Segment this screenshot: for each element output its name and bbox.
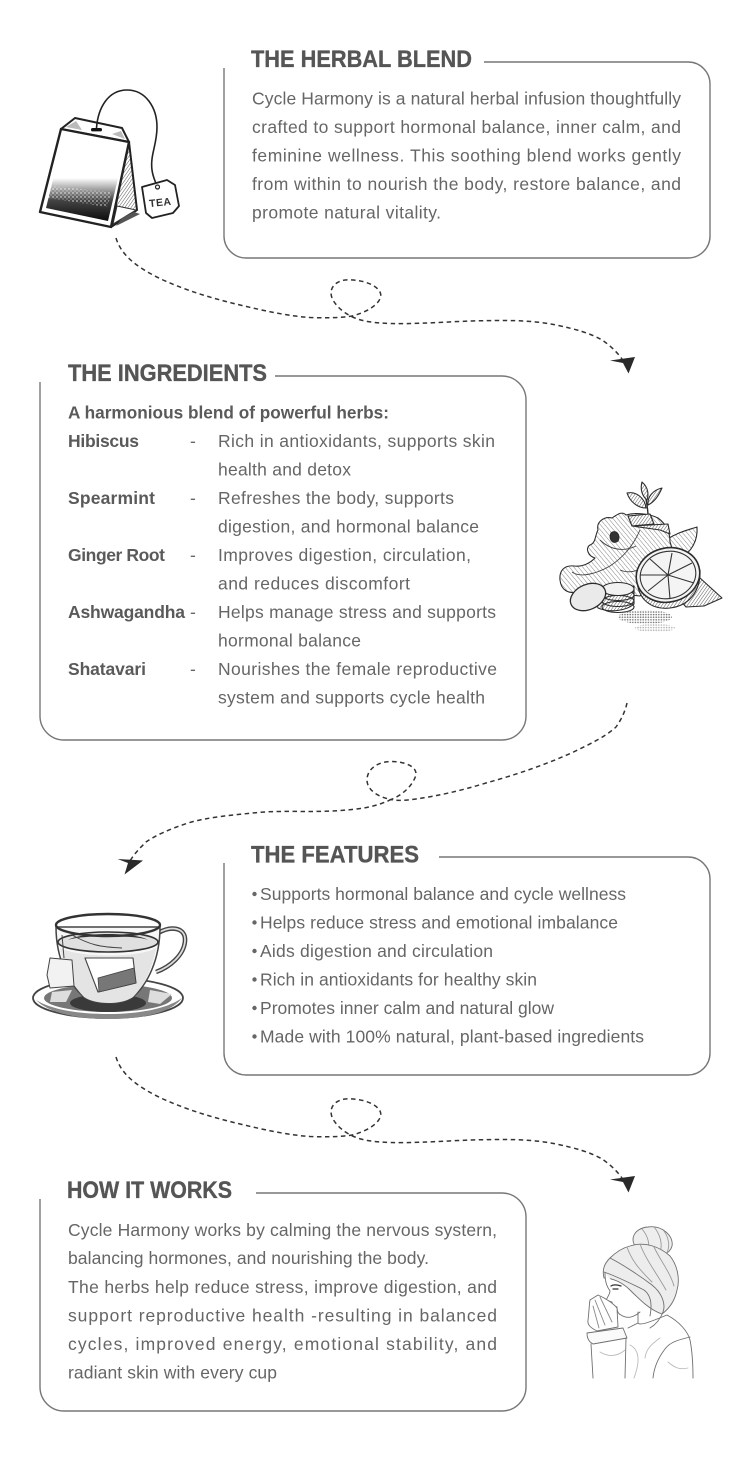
- ingredient: ashwagandha: [68, 602, 496, 650]
- ingredient: ginger root: Improves digestion, circulation,: [218, 545, 471, 565]
- heading: how it works: HOW IT WORKS: [67, 1177, 232, 1204]
- subheading: A harmonious blend of powerful herbs:: [68, 402, 389, 422]
- ingredient: spearmint: Refreshes the body, supports: [218, 488, 454, 508]
- ingredient: hibiscus: -: [190, 431, 196, 451]
- icon: woman sipping tea: [587, 1227, 693, 1378]
- list: features: Promotes inner calm and natural glow: [260, 998, 554, 1018]
- arrowhead: [610, 1176, 635, 1192]
- arrow: ingredients to cup: [118, 703, 627, 874]
- text: how it works description: support reproductive health -resulting in balanced: [68, 1306, 497, 1326]
- text: herbal blend description: from within to nourish the body, restore balance, and: [252, 174, 681, 194]
- ingredient: hibiscus: [68, 431, 495, 480]
- list: features: Rich in antioxidants for healthy skin: [260, 970, 537, 990]
- ingredient: ginger root: and reduces discomfort: [218, 574, 410, 594]
- ingredient: ashwagandha: hormonal balance: [218, 630, 361, 650]
- ingredient: shatavari: -: [190, 659, 196, 679]
- text: how it works description: [68, 1220, 497, 1382]
- text: how it works description: The herbs help reduce stress, improve digestion, and: [68, 1277, 497, 1297]
- text: herbal blend description: Cycle Harmony is a natural herbal infusion thoughtfully: [252, 88, 681, 108]
- panel: the herbal blend: [224, 46, 710, 258]
- arrow: tea bag to ingredients: [116, 238, 635, 374]
- ingredient: ginger root: Ginger Root: [68, 545, 165, 565]
- ingredient: spearmint: Spearmint: [68, 488, 155, 508]
- ingredient: hibiscus: health and detox: [218, 460, 351, 480]
- ingredient: hibiscus: Rich in antioxidants, supports skin: [218, 431, 495, 451]
- heading: the features: THE FEATURES: [251, 842, 419, 868]
- list: features: Helps reduce stress and emotional imbalance: [260, 912, 618, 932]
- icon: tea bag: [40, 90, 179, 227]
- panel: the ingredients: [40, 360, 526, 740]
- ingredient: shatavari: Nourishes the female reproductive: [218, 659, 497, 679]
- text: how it works description: radiant skin with every cup: [68, 1362, 277, 1382]
- icon: ginger, lemon and herbs: [560, 482, 722, 632]
- ingredient: ashwagandha: Helps manage stress and supports: [218, 602, 496, 622]
- text: how it works description: Cycle Harmony works by calming the nervous systern,: [68, 1220, 497, 1240]
- list: features: [252, 884, 644, 1046]
- text: how it works description: cycles, improved energy, emotional stability, and: [68, 1334, 497, 1354]
- list: features: Made with 100% natural, plant-based ingredients: [260, 1026, 644, 1046]
- ingredient: shatavari: [68, 659, 497, 708]
- arrow: cup to how it works: [116, 1057, 635, 1192]
- ingredient: ginger root: [68, 545, 471, 594]
- heading: the ingredients: THE INGREDIENTS: [68, 360, 267, 387]
- heading: the herbal blend: THE HERBAL BLEND: [251, 46, 472, 73]
- text: herbal blend description: promote natural vitality.: [252, 202, 441, 222]
- arrowhead: [118, 859, 143, 874]
- label: tea tag: TEA: [149, 196, 172, 210]
- ingredient: ginger root: -: [190, 545, 196, 565]
- text: how it works description: balancing hormones, and nourishing the body.: [68, 1248, 429, 1268]
- list: features: Aids digestion and circulation: [260, 941, 493, 961]
- ingredient: shatavari: Shatavari: [68, 659, 146, 679]
- panel: how it works: [40, 1177, 526, 1411]
- ingredient: spearmint: [68, 488, 479, 536]
- ingredient: shatavari: system and supports cycle health: [218, 688, 485, 708]
- ingredient: spearmint: digestion, and hormonal balance: [218, 516, 479, 536]
- arrowhead: [610, 357, 635, 374]
- text: herbal blend description: [252, 88, 681, 222]
- list: features: Supports hormonal balance and cycle wellness: [260, 884, 626, 904]
- panel: the features: [224, 842, 710, 1075]
- ingredient: spearmint: -: [190, 488, 196, 508]
- ingredient: hibiscus: Hibiscus: [68, 431, 139, 451]
- text: herbal blend description: feminine wellness. This soothing blend works gently: [252, 146, 681, 166]
- ingredient: ashwagandha: -: [190, 602, 196, 622]
- ingredient: ashwagandha: Ashwagandha: [68, 602, 185, 622]
- text: herbal blend description: crafted to support hormonal balance, inner calm, and: [252, 117, 681, 137]
- icon: tea cup on saucer: [33, 914, 185, 1019]
